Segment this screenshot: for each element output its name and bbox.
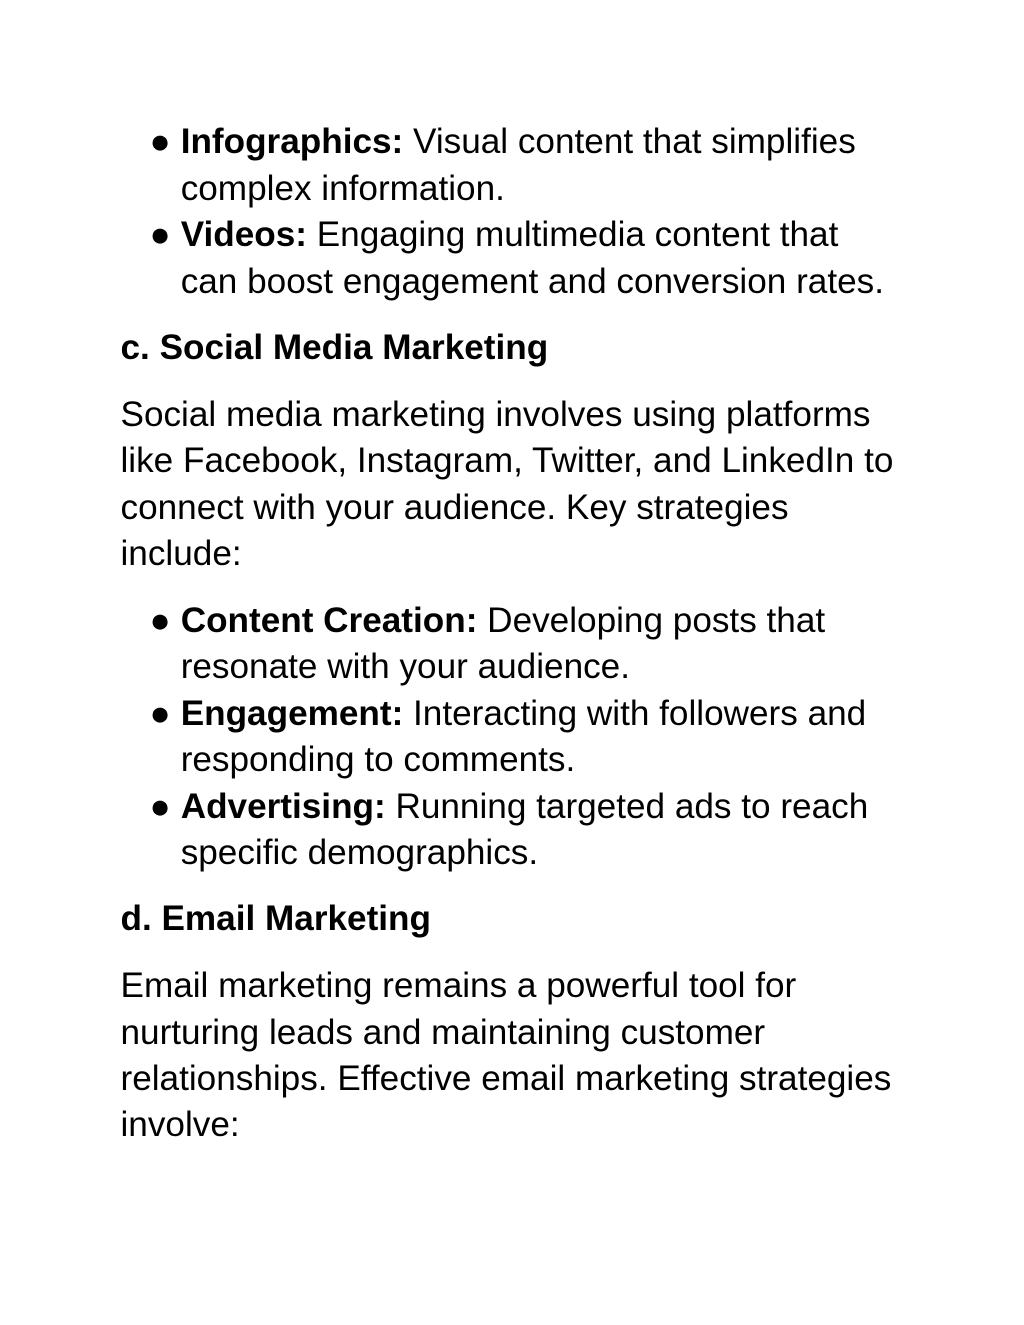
bullet item: advertising: [150, 787, 868, 872]
bullet item: content creation: [150, 601, 825, 686]
bullet item: advertising: Advertising: Running targeted ads to reach: [181, 787, 868, 826]
heading: email marketing: d. Email Marketing: [120, 899, 431, 938]
paragraph: social media marketing intro: like Facebook, Instagram, Twitter, and LinkedIn to: [120, 441, 893, 480]
paragraph: social media marketing intro: include:: [120, 534, 242, 573]
bullet item: infographics: Infographics: Visual content that simplifies: [181, 122, 856, 161]
bullet list: content formats: [150, 122, 884, 301]
paragraph: social media marketing intro: Social media marketing involves using platforms: [120, 395, 870, 434]
bullet item: advertising: ●: [150, 787, 171, 826]
bullet item: engagement: responding to comments.: [181, 740, 575, 779]
paragraph: social media marketing intro: [120, 395, 893, 573]
bullet item: engagement: [150, 694, 866, 779]
bullet item: engagement: ●: [150, 694, 171, 733]
paragraph: email marketing intro: Email marketing remains a powerful tool for: [120, 966, 796, 1005]
bullet item: videos: can boost engagement and conversion rates.: [181, 262, 884, 301]
paragraph: email marketing intro: nurturing leads and maintaining customer: [120, 1013, 765, 1052]
bullet item: content creation: ●: [150, 601, 171, 640]
bullet item: content creation: resonate with your audience.: [181, 647, 630, 686]
bullet item: infographics: ●: [150, 122, 171, 161]
bullet item: infographics: complex information.: [181, 169, 505, 208]
paragraph: email marketing intro: involve:: [120, 1105, 240, 1144]
bullet item: advertising: specific demographics.: [181, 833, 538, 872]
bullet item: engagement: Engagement: Interacting with followers and: [181, 694, 866, 733]
bullet list: social media strategies: [150, 601, 868, 872]
bullet item: videos: Videos: Engaging multimedia content that: [181, 215, 838, 254]
bullet item: videos: ●: [150, 215, 171, 254]
heading: social media marketing: c. Social Media Marketing: [120, 328, 548, 367]
bullet item: content creation: Content Creation: Developing posts that: [181, 601, 825, 640]
bullet item: infographics: [150, 122, 856, 208]
bullet item: videos: [150, 215, 884, 301]
paragraph: email marketing intro: [120, 966, 891, 1144]
paragraph: email marketing intro: relationships. Effective email marketing strategies: [120, 1059, 891, 1098]
paragraph: social media marketing intro: connect with your audience. Key strategies: [120, 488, 789, 527]
